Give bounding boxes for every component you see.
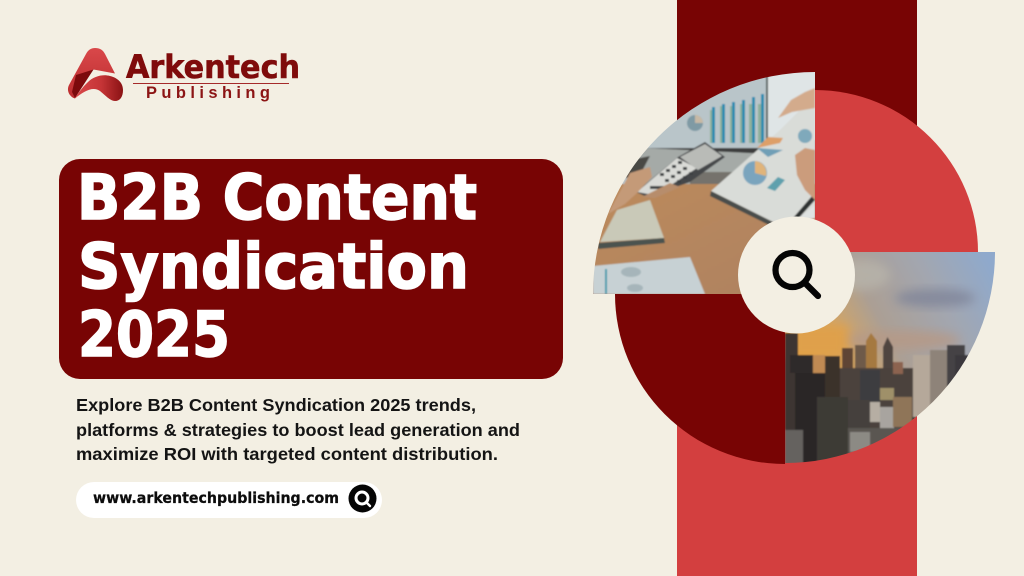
- panel: dark red vertical band: [677, 0, 917, 295]
- logo: Arkentech Publishing: [68, 48, 300, 102]
- photo: city skyline at sunset: [785, 250, 997, 465]
- quarter circle: light red: [815, 90, 978, 252]
- centre circle with magnifier icon: [738, 216, 855, 334]
- description text: maximize ROI with targeted content distribution.: [76, 444, 498, 464]
- panel: light red vertical band: [677, 294, 917, 576]
- website pill: [76, 482, 382, 518]
- description text: platforms & strategies to boost lead generation and: [76, 420, 520, 440]
- description text: [76, 395, 520, 464]
- logo wordmark: Arkentech: [126, 48, 300, 86]
- title text: [77, 161, 477, 371]
- title panel: [59, 159, 563, 379]
- logo tagline: Publishing: [146, 84, 270, 102]
- description text: Explore B2B Content Syndication 2025 trends,: [76, 395, 476, 415]
- icon: magnifier: [776, 253, 818, 296]
- icon: small magnifier: [348, 484, 376, 512]
- photo: office desk with calculator and charts: [590, 70, 817, 296]
- quarter circle: dark red: [615, 294, 785, 464]
- icon: logo ribbon A: [68, 48, 123, 101]
- title text: Syndication: [78, 230, 469, 303]
- title text: 2025: [78, 298, 230, 371]
- website url: www.arkentechpublishing.com: [93, 489, 339, 507]
- title text: B2B Content: [77, 161, 477, 234]
